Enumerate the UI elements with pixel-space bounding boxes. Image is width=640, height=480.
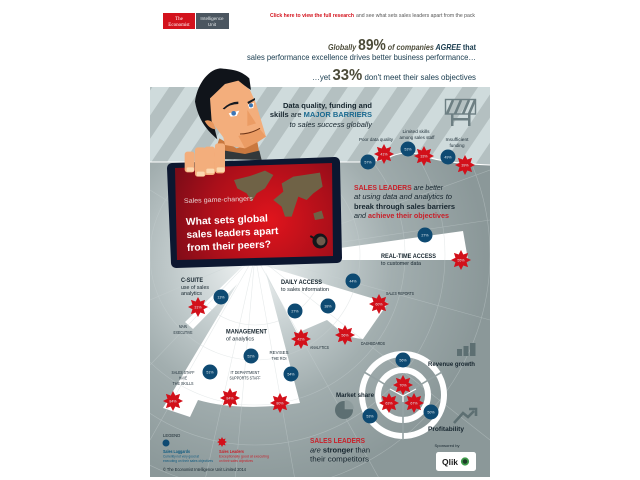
sales leaders paragraph xyxy=(354,183,455,220)
ring chart: 63% xyxy=(385,402,393,406)
management of analytics: 51% xyxy=(206,370,214,374)
collar xyxy=(223,151,262,160)
barrier: limited skills: Limited skills xyxy=(402,129,430,134)
tablet title: What sets global xyxy=(186,213,268,228)
stronger than competitors text xyxy=(310,436,370,464)
barrier: insufficient funding: 49% xyxy=(444,156,452,160)
ring chart: 70% xyxy=(399,384,407,388)
management of analytics: IT DEPARTMENT xyxy=(230,370,260,375)
management of analytics: REVISES xyxy=(270,350,289,355)
management of analytics: HAVE xyxy=(179,376,187,380)
daily access: 44% xyxy=(349,280,357,284)
hand xyxy=(185,143,225,177)
C-suite: 13% xyxy=(217,296,225,300)
fan: C-suite xyxy=(185,266,253,329)
icon: bars xyxy=(457,343,476,356)
real-time access xyxy=(381,228,471,270)
sponsor xyxy=(434,443,476,471)
legend: Exceptionally good at executing xyxy=(219,454,269,458)
link line xyxy=(270,13,475,19)
management of analytics xyxy=(163,328,298,413)
stronger than competitors text: SALES LEADERS xyxy=(310,436,365,445)
sales leaders paragraph: at using data and analytics to xyxy=(354,192,452,201)
stronger than competitors text: are stronger than xyxy=(310,446,370,454)
logo: The Economist Intelligence Unit: Intelligence xyxy=(200,16,224,21)
real-time access: 27% xyxy=(421,234,429,238)
headline: Globally 89% of companies AGREE that xyxy=(328,37,476,54)
real-time access: to customer data xyxy=(381,261,421,267)
tablet title xyxy=(186,213,280,254)
world map xyxy=(234,171,324,220)
management of analytics: 84% xyxy=(169,400,177,404)
management of analytics: 84% xyxy=(226,396,234,400)
barrier: insufficient funding: funding xyxy=(450,143,465,148)
management of analytics: SUPPORTS STAFF xyxy=(230,376,261,380)
daily access: 38% xyxy=(324,304,332,308)
daily access: 56% xyxy=(341,334,349,338)
revenue growth label: Revenue growth xyxy=(428,361,475,368)
ring chart: 50% xyxy=(427,410,435,414)
legend: Currently not very good at xyxy=(163,454,199,458)
barrier: limited skills: 53% xyxy=(404,148,412,152)
eyes and mouth xyxy=(223,98,260,134)
barrier: poor data quality: 57% xyxy=(364,160,372,164)
fan: management xyxy=(163,266,300,417)
link line: Click here to view the full research xyxy=(270,13,354,19)
C-suite: use of sales xyxy=(181,285,210,291)
tablet title: sales leaders apart xyxy=(186,226,279,241)
barrier: limited skills: 33% xyxy=(420,154,428,158)
daily access: ANALYTICS xyxy=(310,345,329,350)
legend: LEGEND xyxy=(163,433,180,438)
daily access: 60% xyxy=(375,302,383,306)
neck xyxy=(213,138,260,157)
C-suite: analytics xyxy=(181,291,203,297)
legend: Sales Leaders xyxy=(219,449,245,454)
daily access: 42% xyxy=(297,338,305,342)
legend: executing on their sales objectives xyxy=(163,459,213,463)
management of analytics: THE SKILLS xyxy=(172,381,194,386)
ring chart: 67% xyxy=(410,402,418,406)
tablet title: from their peers? xyxy=(187,239,271,254)
barrier: insufficient funding xyxy=(440,137,475,175)
barrier: poor data quality xyxy=(359,137,394,170)
barriers heading: to sales success globally xyxy=(289,120,373,129)
tablet xyxy=(172,162,337,263)
headline: …yet 33% don't meet their sales objectives xyxy=(312,67,476,84)
daily access: to sales information xyxy=(281,287,329,293)
management of analytics: MANAGEMENT xyxy=(226,328,267,336)
C-suite: C-SUITE xyxy=(181,277,204,284)
barrier: limited skills: among sales staff xyxy=(400,135,435,140)
stronger than competitors text: their competitors xyxy=(310,454,369,464)
management of analytics: THE ROI xyxy=(272,356,286,361)
man illustration xyxy=(195,68,266,160)
daily access: 27% xyxy=(291,310,299,314)
logo: The Economist Intelligence Unit: The xyxy=(175,17,184,22)
barriers heading xyxy=(270,101,373,129)
barriers heading: Data quality, funding and xyxy=(283,101,372,110)
daily access: SALES REPORTS xyxy=(386,291,414,296)
face xyxy=(210,81,266,148)
headline: sales performance excellence drives better business performance… xyxy=(247,53,476,62)
sales leaders paragraph: SALES LEADERS are better xyxy=(354,183,443,192)
barrier: limited skills xyxy=(400,129,435,166)
management of analytics: SALES STAFF xyxy=(172,370,195,375)
legend xyxy=(162,433,269,472)
panel background xyxy=(150,87,490,477)
headline xyxy=(247,37,476,84)
sponsor: Sponsored by xyxy=(434,443,460,448)
management of analytics: 80% xyxy=(276,402,284,406)
link line: and see what sets sales leaders apart from the pack xyxy=(356,13,475,19)
hair xyxy=(195,68,251,139)
barrier: insufficient funding: 39% xyxy=(461,164,469,168)
logo: The Economist Intelligence Unit xyxy=(163,13,229,29)
ring chart xyxy=(362,352,444,440)
tablet kicker: Sales game-changers xyxy=(184,196,254,205)
barriers heading: skills are MAJOR BARRIERS xyxy=(270,110,372,119)
stopwatch icon xyxy=(310,234,328,248)
ring chart: 56% xyxy=(399,358,407,362)
fan: daily access xyxy=(262,265,388,339)
management of analytics: 54% xyxy=(287,372,295,376)
barrier: poor data quality: 41% xyxy=(380,152,388,156)
market share label: Market share xyxy=(336,392,374,399)
C-suite xyxy=(174,277,228,335)
profitability label: Profitability xyxy=(428,426,464,433)
sales leaders paragraph: break through sales barriers xyxy=(354,202,455,211)
legend: © The Economist Intelligence Unit Limited 2014 xyxy=(163,467,247,472)
icon: road barrier xyxy=(446,100,476,126)
ring chart: 53% xyxy=(366,414,374,418)
logo: The Economist Intelligence Unit: Unit xyxy=(208,22,217,27)
face shadow xyxy=(238,110,266,148)
C-suite: 31% xyxy=(194,306,202,310)
management of analytics: 52% xyxy=(247,354,255,358)
legend: on their sales objectives xyxy=(219,459,253,463)
daily access: DAILY ACCESS xyxy=(281,279,323,286)
barrier: insufficient funding: Insufficient xyxy=(446,137,469,142)
icon: rising arrow xyxy=(454,409,476,423)
C-suite: EXECUTIVE xyxy=(174,330,193,335)
real-time access: 55% xyxy=(457,258,465,262)
daily access: DASHBOARDS xyxy=(361,341,385,346)
ear xyxy=(205,120,216,129)
daily access xyxy=(281,274,414,350)
sales leaders paragraph: and achieve their objectives xyxy=(354,211,449,220)
barrier: poor data quality: Poor data quality xyxy=(359,137,394,142)
grid lines xyxy=(150,162,490,477)
fan: real-time access xyxy=(340,231,468,260)
logo: The Economist Intelligence Unit: Economist xyxy=(168,23,190,28)
legend: Sales Laggards xyxy=(163,449,191,454)
management of analytics: of analytics xyxy=(226,336,254,342)
sponsor: Qlik xyxy=(442,457,458,467)
C-suite: MAIN xyxy=(179,324,187,329)
real-time access: REAL-TIME ACCESS xyxy=(381,253,437,260)
icon: pie xyxy=(335,400,354,419)
